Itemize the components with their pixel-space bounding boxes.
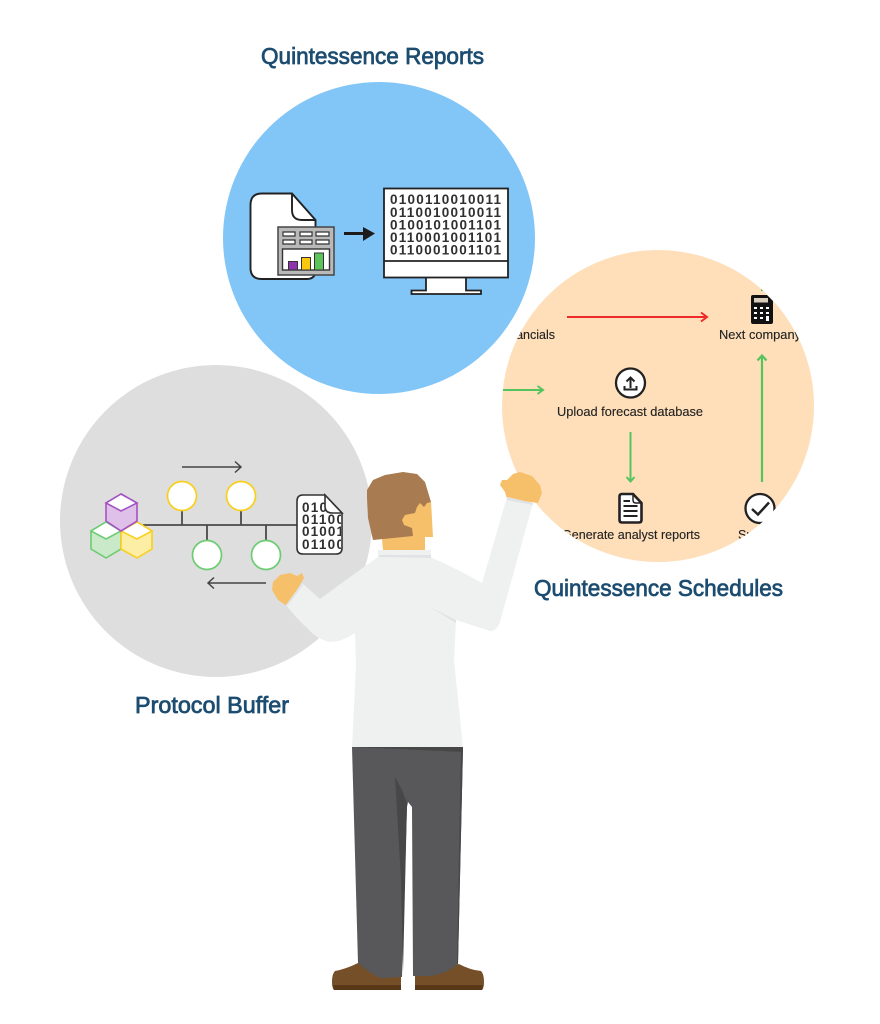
icon: computer monitor: 0110001001101 (390, 230, 501, 245)
label: Generate analyst reports: Generate analyst reports (562, 528, 700, 542)
arrow: black conversion (344, 227, 375, 241)
node: yellow circles (168, 482, 256, 510)
arrow: green down (626, 432, 634, 482)
panel: Protocol Buffer circle (60, 365, 372, 677)
trousers (352, 747, 463, 978)
icon: binary document: 010 (302, 500, 327, 515)
shirt (286, 497, 533, 747)
shoes (332, 963, 484, 990)
person illustration (272, 472, 542, 990)
icon: binary document: 01100 (302, 537, 344, 552)
icon: upload (616, 368, 645, 398)
icon: spreadsheet document (250, 194, 334, 279)
hand: raised right (500, 472, 542, 503)
node: green circles (192, 540, 280, 570)
hand: raised left (272, 573, 304, 606)
arrow: green to upload (503, 386, 543, 394)
hair (367, 472, 431, 540)
title: Quintessence Reports: Quintessence Reports (261, 43, 484, 69)
icon: calculator (751, 295, 773, 324)
shirt shadows (286, 497, 533, 623)
icon: computer monitor: 0100110010011 (390, 192, 501, 207)
label: Financials: Financials (499, 328, 555, 342)
arrow: bottom left (208, 578, 266, 588)
label: Next company: Next company (719, 328, 802, 342)
label: Submit: Submit (738, 528, 777, 542)
icon: computer monitor: 0110010010011 (390, 205, 501, 220)
network bus (143, 510, 297, 541)
label: Upload forecast database: Upload forecast database (557, 405, 703, 419)
panel: Quintessence Schedules circle (499, 250, 814, 562)
neck and face (382, 501, 433, 550)
title: Protocol Buffer: Protocol Buffer (135, 692, 289, 718)
collar (378, 550, 431, 558)
panel: Quintessence Reports circle (223, 82, 535, 394)
icon: binary document (297, 495, 344, 554)
icon: stacked cubes (91, 494, 152, 558)
icon: computer monitor (384, 188, 508, 294)
icon: computer monitor: 0110001001101 (390, 242, 501, 258)
title: Quintessence Schedules: Quintessence Schedules (534, 575, 783, 601)
icon: binary document: 01100 (302, 512, 344, 527)
arrow: red to next company (567, 312, 707, 322)
icon: report document (620, 494, 642, 522)
arrow: top right (182, 462, 241, 472)
arrow: green up (758, 356, 766, 482)
icon: binary document: 01001 (302, 524, 344, 539)
icon: check circle (746, 494, 774, 523)
icon: computer monitor: 0100101001101 (390, 218, 501, 232)
